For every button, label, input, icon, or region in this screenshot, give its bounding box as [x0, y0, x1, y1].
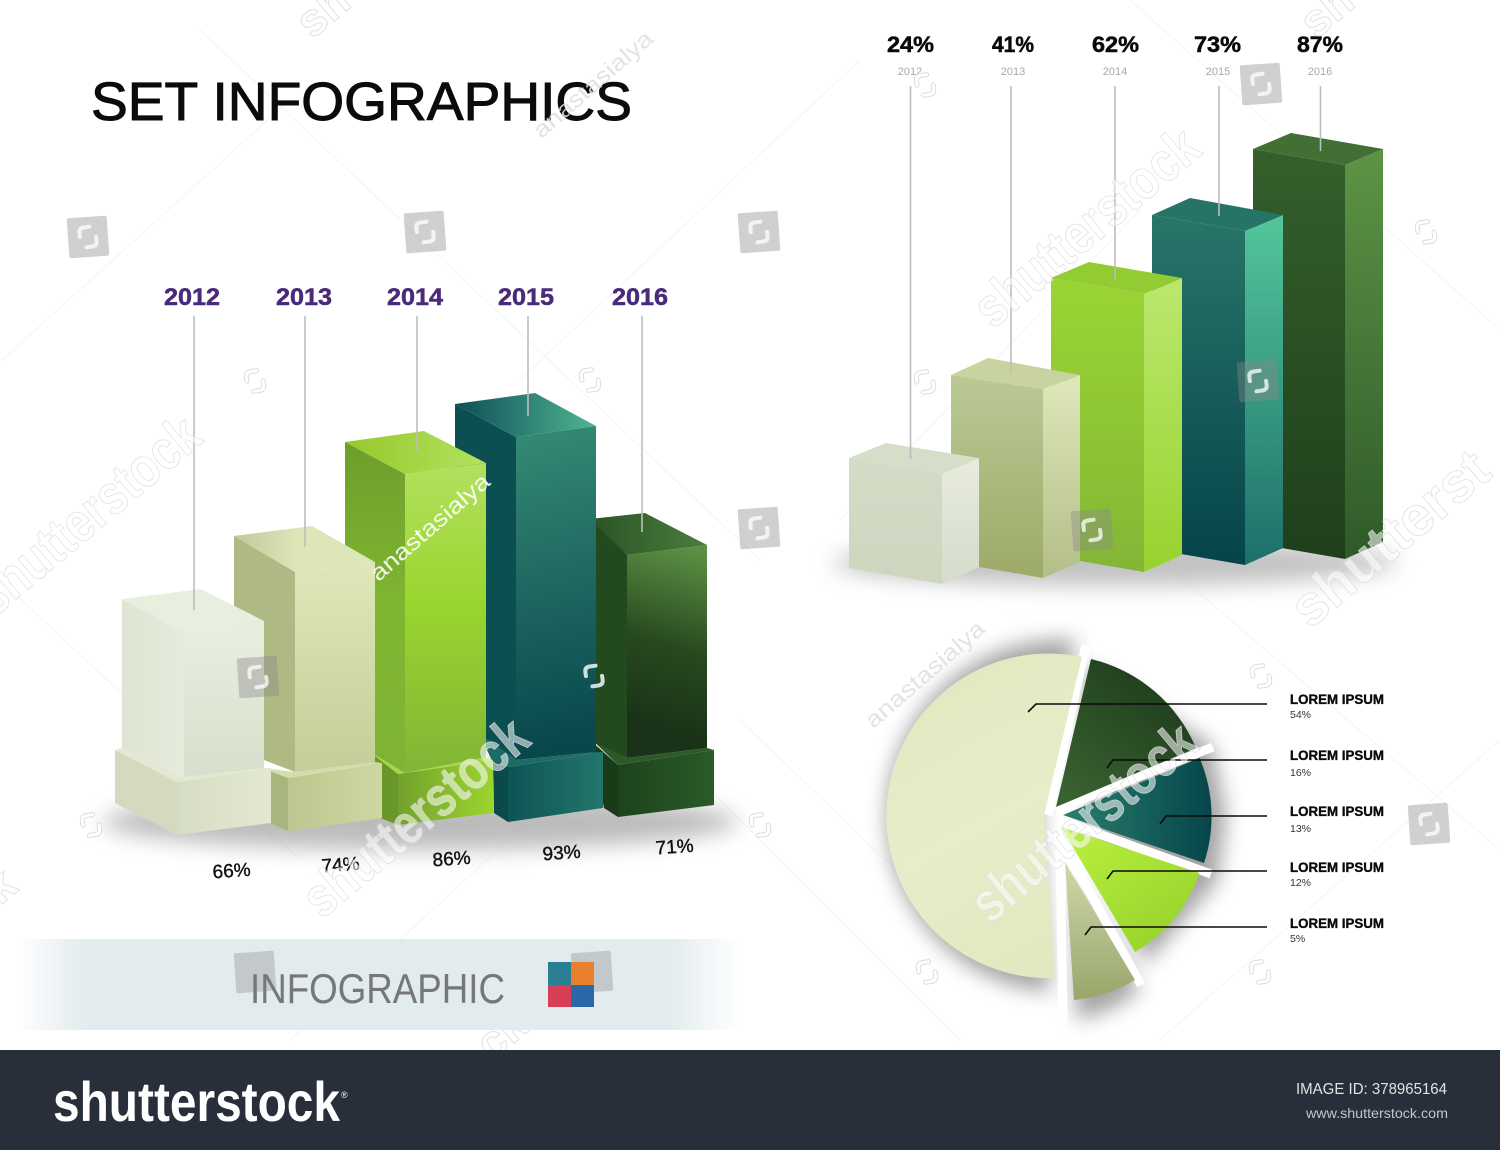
watermark: stock text: shutterstock	[957, 709, 1209, 934]
percentage labels: 62%	[1092, 32, 1139, 57]
percentage labels	[887, 32, 1343, 57]
percentage labels: 66%	[212, 860, 251, 883]
bar 2014	[1051, 262, 1182, 572]
year labels: 2012	[898, 66, 922, 78]
slice 54%	[886, 654, 1082, 978]
year labels: 2014	[387, 284, 444, 311]
year labels: 2015	[498, 284, 554, 311]
ground shadow	[833, 540, 1397, 586]
watermark: stock text: shutterst	[1277, 437, 1500, 639]
chart: left stepped 3D bars	[102, 284, 738, 883]
legend	[1290, 692, 1384, 945]
leader lines	[910, 86, 1320, 459]
bar 2012	[115, 589, 271, 835]
banner	[15, 939, 740, 1030]
year labels: 2014	[1103, 66, 1127, 78]
slice 13%	[1063, 758, 1212, 863]
leader lines	[194, 316, 642, 610]
watermark: stock text: shutterstock	[289, 704, 541, 929]
year labels: 2015	[1206, 66, 1230, 78]
legend: 13%	[1290, 823, 1311, 835]
chart: right rising 3D bars	[833, 32, 1397, 586]
percentage labels: 71%	[655, 836, 694, 859]
bar 2013	[234, 526, 382, 831]
legend: 12%	[1290, 877, 1311, 889]
legend: 54%	[1290, 709, 1311, 721]
year labels	[164, 284, 668, 311]
banner watermark badges	[234, 951, 613, 993]
watermark: author on white	[528, 25, 990, 733]
website: www.shutterstock.com	[1305, 1105, 1448, 1121]
bar 2015	[1152, 198, 1283, 565]
percentage labels: 87%	[1297, 32, 1343, 57]
watermark: partial stock text at corners	[0, 0, 1364, 914]
watermark: author on white: anastasialya	[860, 615, 990, 733]
image id: IMAGE ID: 378965164	[1296, 1081, 1447, 1098]
bar 2013	[951, 358, 1080, 578]
legend: 16%	[1290, 767, 1311, 779]
slice 5%	[1065, 862, 1135, 1000]
slice 12%	[1061, 827, 1200, 952]
percentage labels: 41%	[992, 32, 1034, 57]
year labels: 2016	[1308, 66, 1332, 78]
year labels: 2012	[164, 284, 220, 311]
legend: LOREM IPSUM	[1290, 860, 1384, 875]
percentage labels: 93%	[542, 842, 581, 865]
footer	[0, 1050, 1500, 1150]
registered mark: ®	[341, 1090, 348, 1100]
percentage labels: 24%	[887, 32, 934, 57]
pointer lines	[1028, 704, 1267, 935]
watermark: partial stock text at bottom edge: ck	[465, 997, 538, 1070]
bar 2016	[590, 513, 714, 817]
legend: LOREM IPSUM	[1290, 916, 1384, 931]
footer logo: shutterstock	[53, 1070, 341, 1133]
watermark: stock text: shutterstock	[960, 114, 1212, 339]
bar 2015	[455, 393, 603, 822]
percentage labels: 73%	[1194, 32, 1241, 57]
ground shadow	[102, 794, 738, 850]
year labels: 2013	[1001, 66, 1025, 78]
year labels	[898, 66, 1332, 78]
legend: LOREM IPSUM	[1290, 804, 1384, 819]
watermark: stock text	[0, 114, 1500, 934]
bar 2016	[1253, 133, 1383, 559]
pie shadows	[887, 640, 1226, 1020]
percentage labels	[212, 836, 694, 883]
white gaps	[1048, 645, 1213, 1024]
watermark: author on white: anastasialya	[528, 25, 658, 143]
year labels: 2013	[276, 284, 332, 311]
bar 2014	[345, 431, 493, 825]
slice 16%	[1056, 659, 1196, 807]
chart: pie	[886, 640, 1384, 1024]
percentage labels: 86%	[432, 848, 471, 871]
title: SET INFOGRAPHICS	[91, 72, 632, 132]
watermark: author on bar: anastasialya	[365, 468, 495, 586]
legend: LOREM IPSUM	[1290, 692, 1384, 707]
legend: LOREM IPSUM	[1290, 748, 1384, 763]
banner text: INFOGRAPHIC	[250, 965, 505, 1012]
year labels: 2016	[612, 284, 668, 311]
icon: colour squares	[548, 962, 594, 1007]
bar 2012	[849, 443, 979, 584]
percentage labels: 74%	[321, 854, 360, 877]
watermark: square badges	[67, 63, 1450, 983]
legend: 5%	[1290, 933, 1305, 945]
